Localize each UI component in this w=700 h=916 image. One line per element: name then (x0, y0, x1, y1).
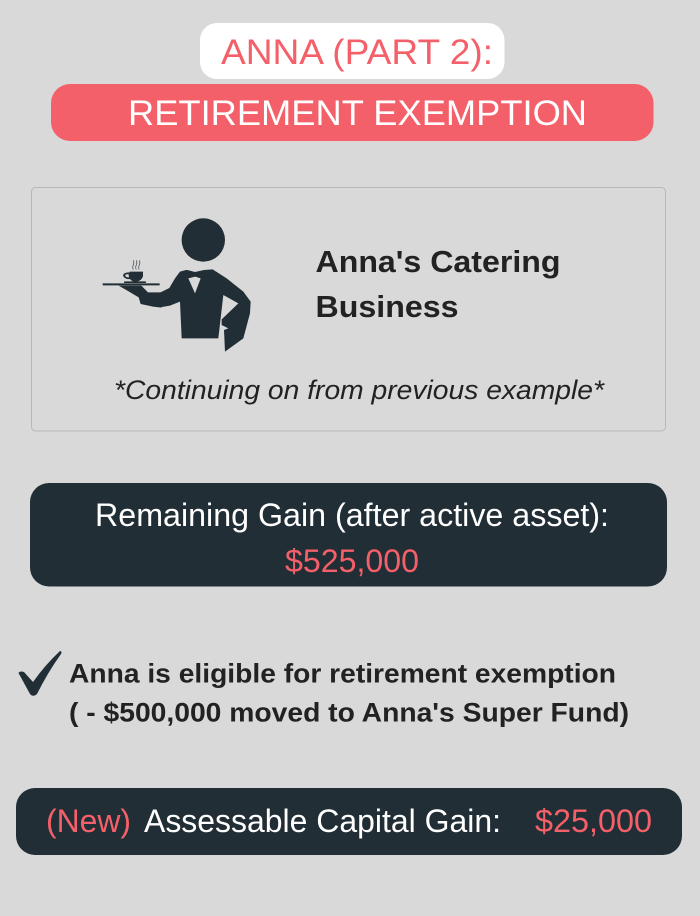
title: Anna (Part 2) (200, 23, 504, 79)
panel: new assessable capital gain: $25,000 (535, 803, 652, 839)
text: business name: Business (316, 289, 458, 324)
text: business name: Anna's Catering (316, 244, 560, 279)
panel: remaining gain: $525,000 (285, 543, 419, 579)
panel: new assessable capital gain: Assessable Capital Gain: (144, 803, 501, 839)
panel: remaining gain: Remaining Gain (after active asset): (95, 497, 609, 533)
title: Anna (Part 2): ANNA (PART 2): (221, 33, 493, 72)
text: business name (316, 244, 560, 324)
heading: Retirement Exemption (51, 84, 654, 141)
callout: retirement exemption eligibility (18, 651, 629, 728)
text: eligibility statement: Anna is eligible for retirement exemption (69, 658, 616, 688)
panel: new assessable capital gain: (New) (46, 803, 131, 839)
text: continuing note: *Continuing on from previous example* (114, 375, 606, 405)
panel: remaining gain (30, 483, 667, 586)
icon: check mark (18, 651, 62, 696)
text: eligibility statement: ( - $500,000 moved to Anna's Super Fund) (69, 698, 629, 728)
panel: Anna's catering business (32, 188, 666, 431)
text: eligibility statement (69, 658, 629, 728)
heading: Retirement Exemption: RETIREMENT EXEMPTION (128, 94, 587, 133)
panel: new assessable capital gain (16, 788, 682, 855)
icon: waiter carrying a tray with a cup (103, 218, 251, 352)
